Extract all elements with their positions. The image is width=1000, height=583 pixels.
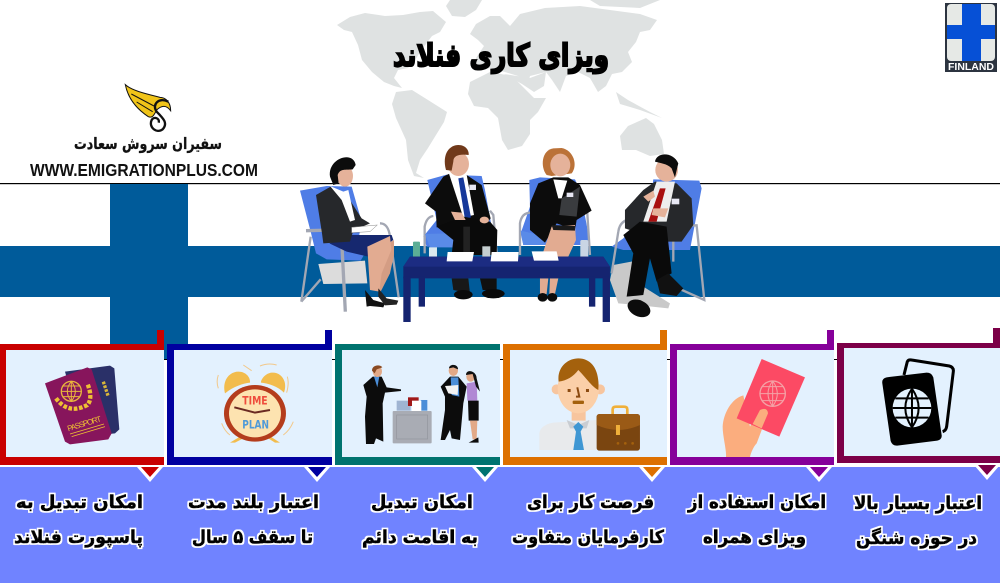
caption: passport [14, 492, 143, 548]
bottom strip [0, 467, 1000, 583]
icon: Finland flag badge [945, 3, 997, 73]
world map background [337, 0, 664, 178]
caption: employers [512, 492, 664, 548]
icon: alarm clock [217, 364, 293, 443]
person: woman taking notes [300, 157, 399, 312]
caption: long validity [188, 492, 319, 548]
panel: convert to Finnish passport [0, 330, 164, 482]
person: man in blue tie [423, 145, 505, 299]
caption: employers: کارفرمایان متفاوت [512, 527, 664, 548]
caption: Schengen: در حوزه شنگن [856, 527, 977, 549]
caption: Schengen [854, 493, 982, 549]
icon: employee with briefcase [539, 358, 640, 451]
company name: سفیران سروش سعادت [74, 134, 222, 153]
icon: black passport [882, 360, 953, 446]
caption: long validity: تا سقف ۵ سال [192, 527, 313, 548]
icon: hand holding passport [723, 359, 805, 457]
caption: passport: پاسپورت فنلاند [14, 527, 143, 548]
table with bottles and name cards [403, 240, 610, 322]
panel: high validity in Schengen area [837, 328, 1000, 480]
illustration: panel meeting [300, 145, 704, 322]
caption: employers: فرصت کار برای [527, 492, 654, 513]
panel: companion visa [670, 330, 834, 482]
title: ویزای کاری فنلاند [393, 38, 609, 74]
icon: alarm clock: TIME [242, 394, 268, 408]
icon: passports: PASSPORT [66, 414, 102, 433]
caption: companion visa: ویزای همراه [703, 527, 806, 548]
person: woman in suit [520, 148, 592, 302]
caption: residence: به اقامت دائم [362, 527, 478, 548]
caption: residence [362, 492, 478, 548]
panel: long validity up to 5 years [167, 330, 332, 482]
background Finnish flag [0, 183, 1000, 360]
logo [30, 85, 258, 180]
icon: business people at a desk [363, 365, 480, 444]
caption: residence: امکان تبدیل [371, 492, 473, 513]
caption: Schengen: اعتبار بسیار بالا [854, 493, 982, 514]
caption: companion visa: امکان استفاده از [687, 492, 826, 513]
icon: alarm clock: PLAN [242, 417, 269, 431]
benefit captions [14, 492, 982, 549]
panel: convert to permanent residence [335, 344, 500, 482]
caption: passport: امکان تبدیل به [16, 492, 143, 513]
person: man in red tie [610, 154, 704, 321]
icon: winged swan [125, 85, 171, 131]
caption: companion visa [687, 492, 826, 548]
icon: Finland flag badge: FINLAND [948, 62, 994, 73]
caption: long validity: اعتبار بلند مدت [188, 492, 319, 513]
panel: work for various employers [503, 330, 667, 482]
website URL: WWW.EMIGRATIONPLUS.COM [30, 160, 258, 180]
icon: passports [45, 366, 119, 444]
